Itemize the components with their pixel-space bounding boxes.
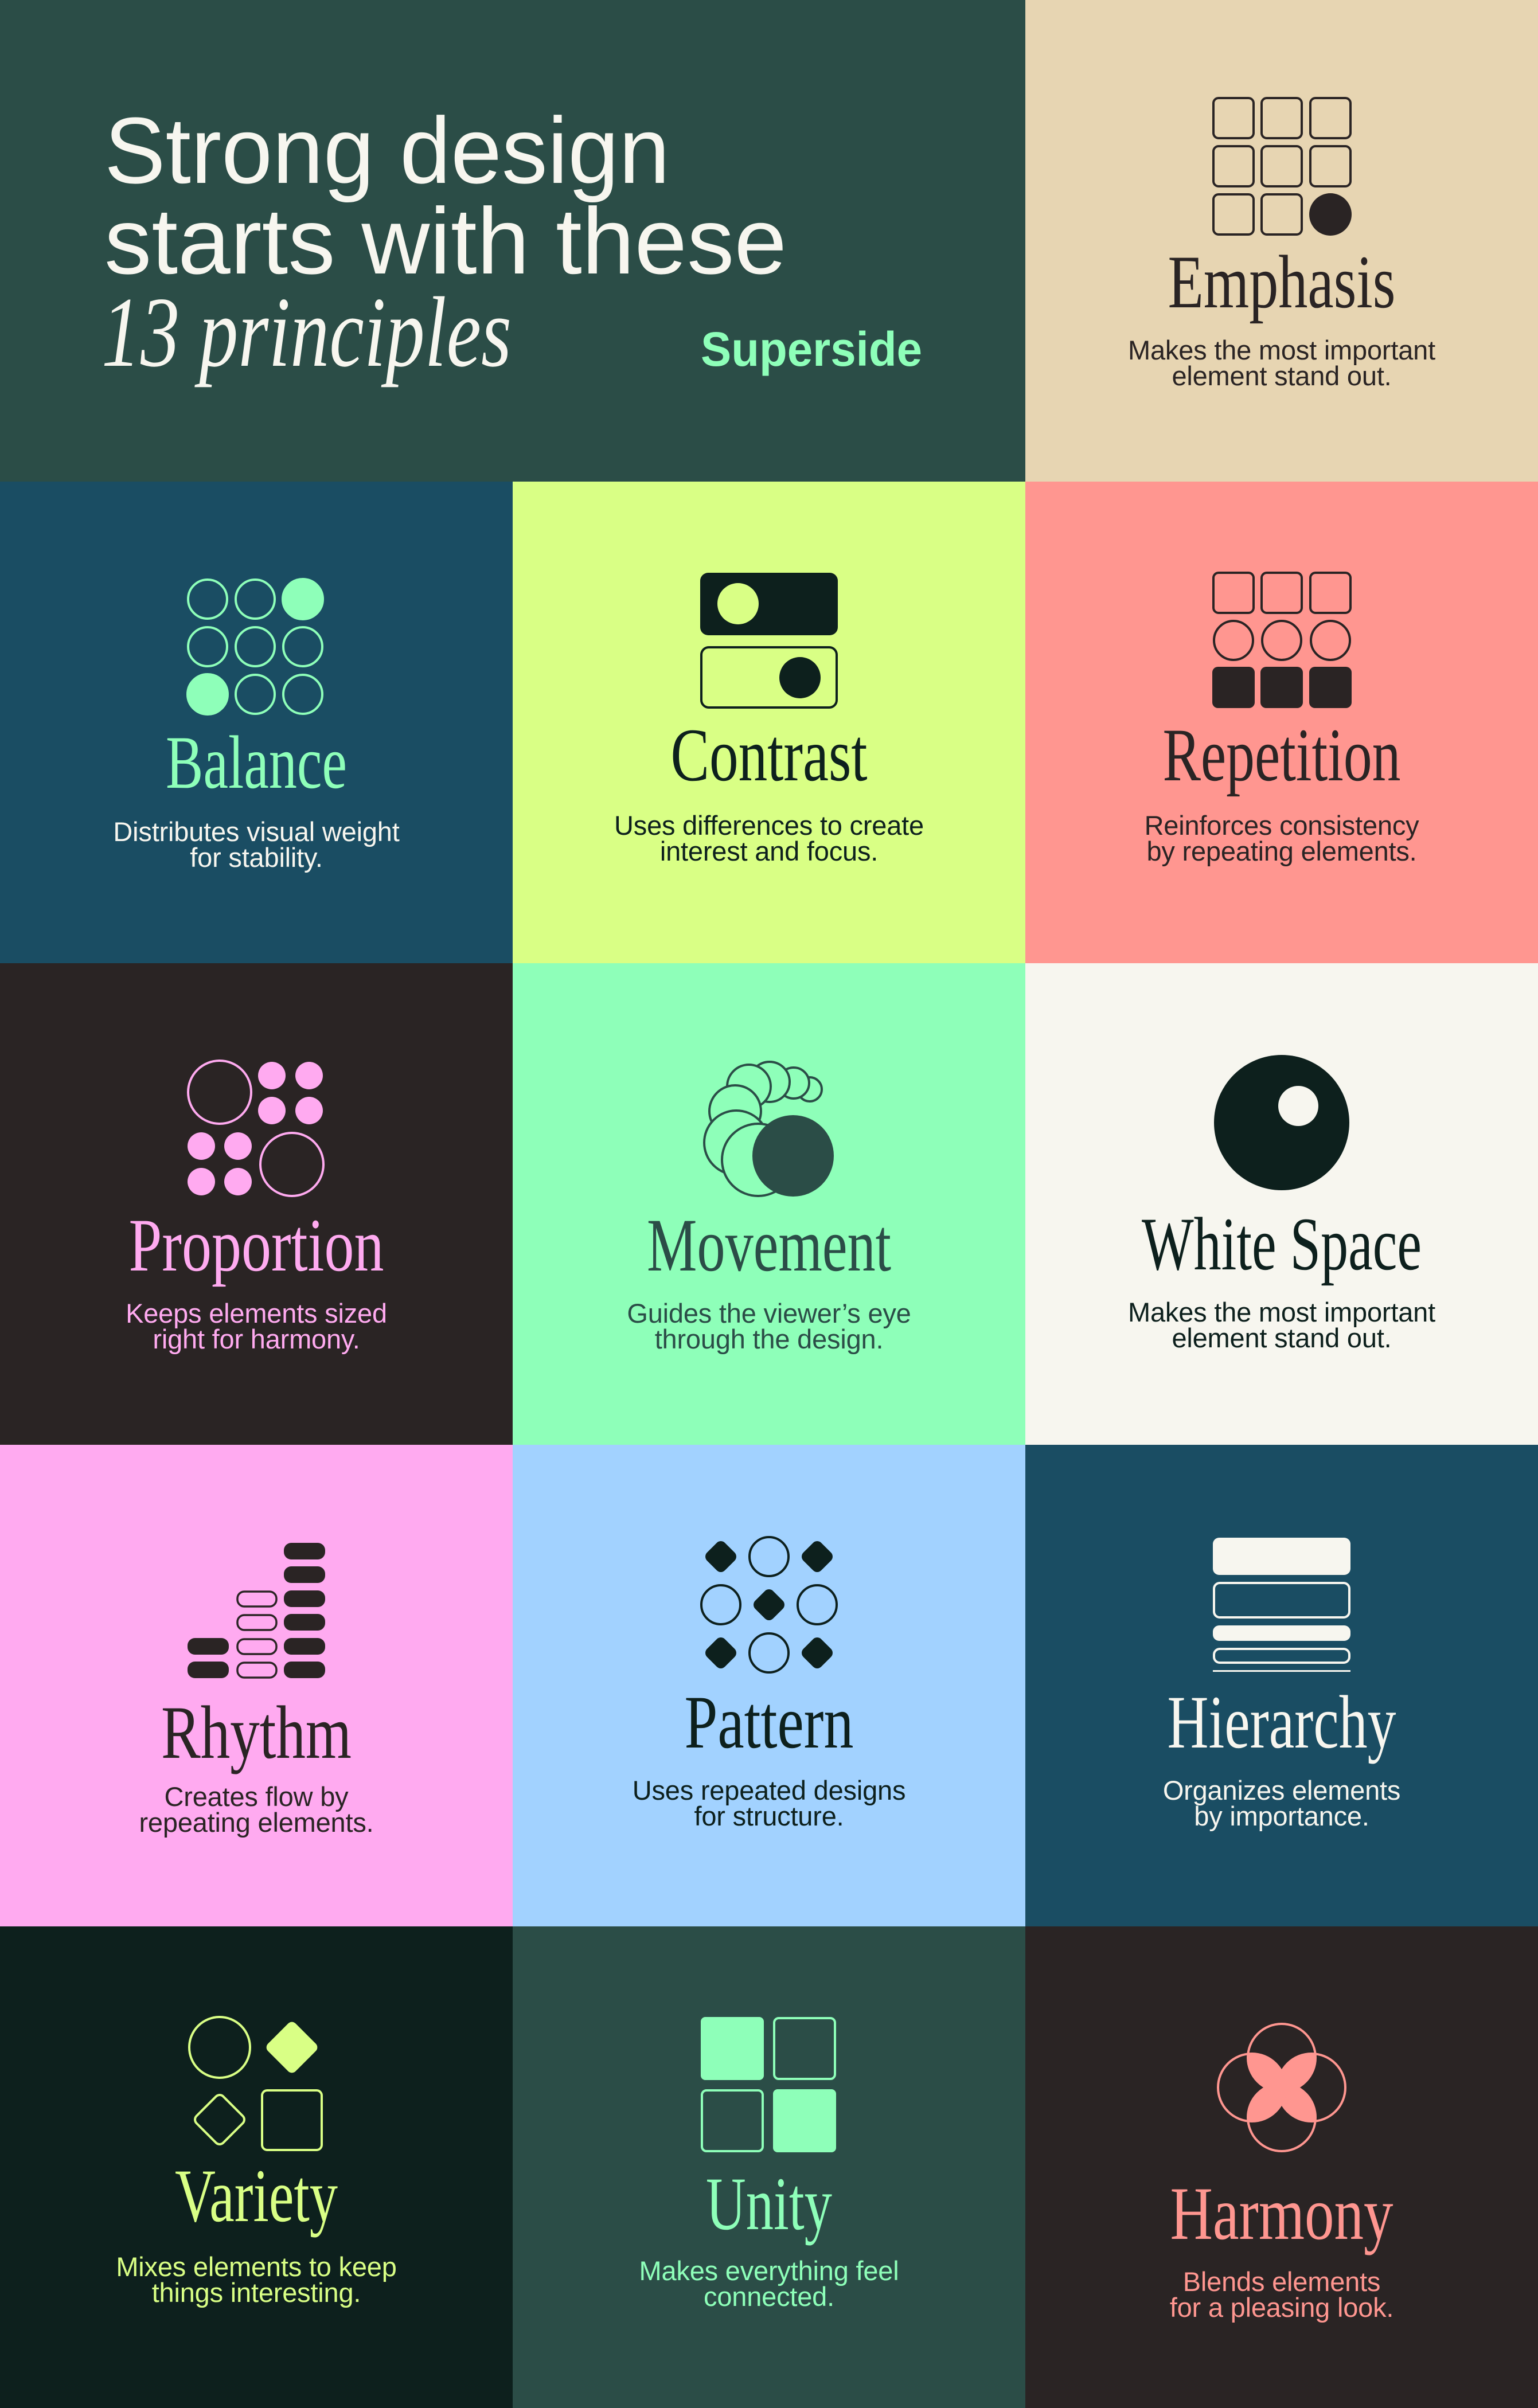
heading: Contrast bbox=[671, 713, 867, 797]
panel: hierarchy bbox=[1025, 1445, 1538, 1926]
icon: contrast toggles bbox=[700, 573, 838, 707]
text block: repeating elements. bbox=[139, 1807, 374, 1838]
text block: connected. bbox=[704, 2281, 834, 2312]
text block: Keeps elements sized bbox=[126, 1298, 387, 1328]
logo: Superside: Superside bbox=[701, 322, 922, 376]
heading: Variety bbox=[175, 2153, 338, 2238]
panel: white space bbox=[1025, 963, 1538, 1445]
heading: White Space bbox=[1142, 1202, 1422, 1286]
text block: element stand out. bbox=[1172, 1323, 1392, 1353]
panel: variety bbox=[0, 1926, 513, 2408]
panel: contrast bbox=[513, 482, 1025, 963]
panel: proportion bbox=[0, 963, 513, 1445]
text block: for structure. bbox=[694, 1801, 844, 1831]
icon: repetition grid bbox=[1212, 573, 1352, 708]
text block: Guides the viewer’s eye bbox=[627, 1298, 911, 1328]
text block: Reinforces consistency bbox=[1145, 810, 1419, 841]
text block: for a pleasing look. bbox=[1170, 2292, 1393, 2323]
heading: Pattern bbox=[685, 1680, 853, 1764]
heading: Unity bbox=[706, 2161, 832, 2246]
panel: movement bbox=[513, 963, 1025, 1445]
icon: unity squares bbox=[701, 2017, 836, 2152]
panel: rhythm bbox=[0, 1445, 513, 1926]
icon: emphasis grid bbox=[1213, 98, 1352, 236]
heading: Repetition bbox=[1163, 713, 1400, 797]
icon: white space circle bbox=[1214, 1055, 1349, 1190]
heading: Harmony bbox=[1170, 2171, 1393, 2255]
text block: through the design. bbox=[655, 1324, 883, 1354]
heading: Rhythm bbox=[161, 1690, 352, 1774]
title: starts with these bbox=[104, 189, 787, 294]
text block: Makes everything feel bbox=[639, 2255, 899, 2286]
text block: for stability. bbox=[190, 842, 323, 873]
icon: proportion circles bbox=[188, 1061, 323, 1196]
icon: movement circles bbox=[704, 1062, 834, 1197]
panel: emphasis bbox=[1025, 0, 1538, 482]
panel: harmony bbox=[1025, 1926, 1538, 2408]
text block: by importance. bbox=[1194, 1801, 1369, 1831]
text block: Blends elements bbox=[1183, 2266, 1380, 2297]
text block: Distributes visual weight bbox=[113, 816, 400, 847]
text block: Uses repeated designs bbox=[633, 1775, 905, 1805]
text block: by repeating elements. bbox=[1146, 836, 1417, 866]
panel: pattern bbox=[513, 1445, 1025, 1926]
icon: rhythm bars bbox=[188, 1543, 325, 1678]
icon: harmony circles bbox=[1218, 2024, 1345, 2151]
text block: Creates flow by bbox=[165, 1781, 349, 1812]
heading: Hierarchy bbox=[1168, 1680, 1396, 1764]
panel: unity bbox=[513, 1926, 1025, 2408]
panel: header bbox=[0, 0, 1025, 482]
icon: variety shapes bbox=[189, 2017, 322, 2150]
text block: Makes the most important bbox=[1128, 1297, 1435, 1327]
heading: Emphasis bbox=[1168, 240, 1396, 324]
text block: Organizes elements bbox=[1163, 1775, 1400, 1805]
heading: Movement bbox=[647, 1203, 891, 1287]
text block: right for harmony. bbox=[153, 1324, 360, 1354]
icon: hierarchy bars bbox=[1213, 1538, 1350, 1672]
text block: interest and focus. bbox=[660, 836, 878, 866]
text block: Makes the most important bbox=[1128, 335, 1435, 365]
text block: things interesting. bbox=[152, 2277, 361, 2308]
title: Strong design bbox=[104, 98, 670, 203]
text block: Mixes elements to keep bbox=[116, 2251, 397, 2282]
title: 13 principles bbox=[102, 276, 512, 388]
icon: pattern grid bbox=[701, 1537, 837, 1672]
panel: repetition bbox=[1025, 482, 1538, 963]
text block: element stand out. bbox=[1172, 361, 1392, 391]
heading: Balance bbox=[166, 720, 347, 804]
heading: Proportion bbox=[128, 1203, 384, 1287]
text block: Uses differences to create bbox=[614, 810, 924, 841]
title bbox=[102, 98, 787, 388]
panel: balance bbox=[0, 482, 513, 963]
icon: balance circles bbox=[188, 579, 323, 714]
